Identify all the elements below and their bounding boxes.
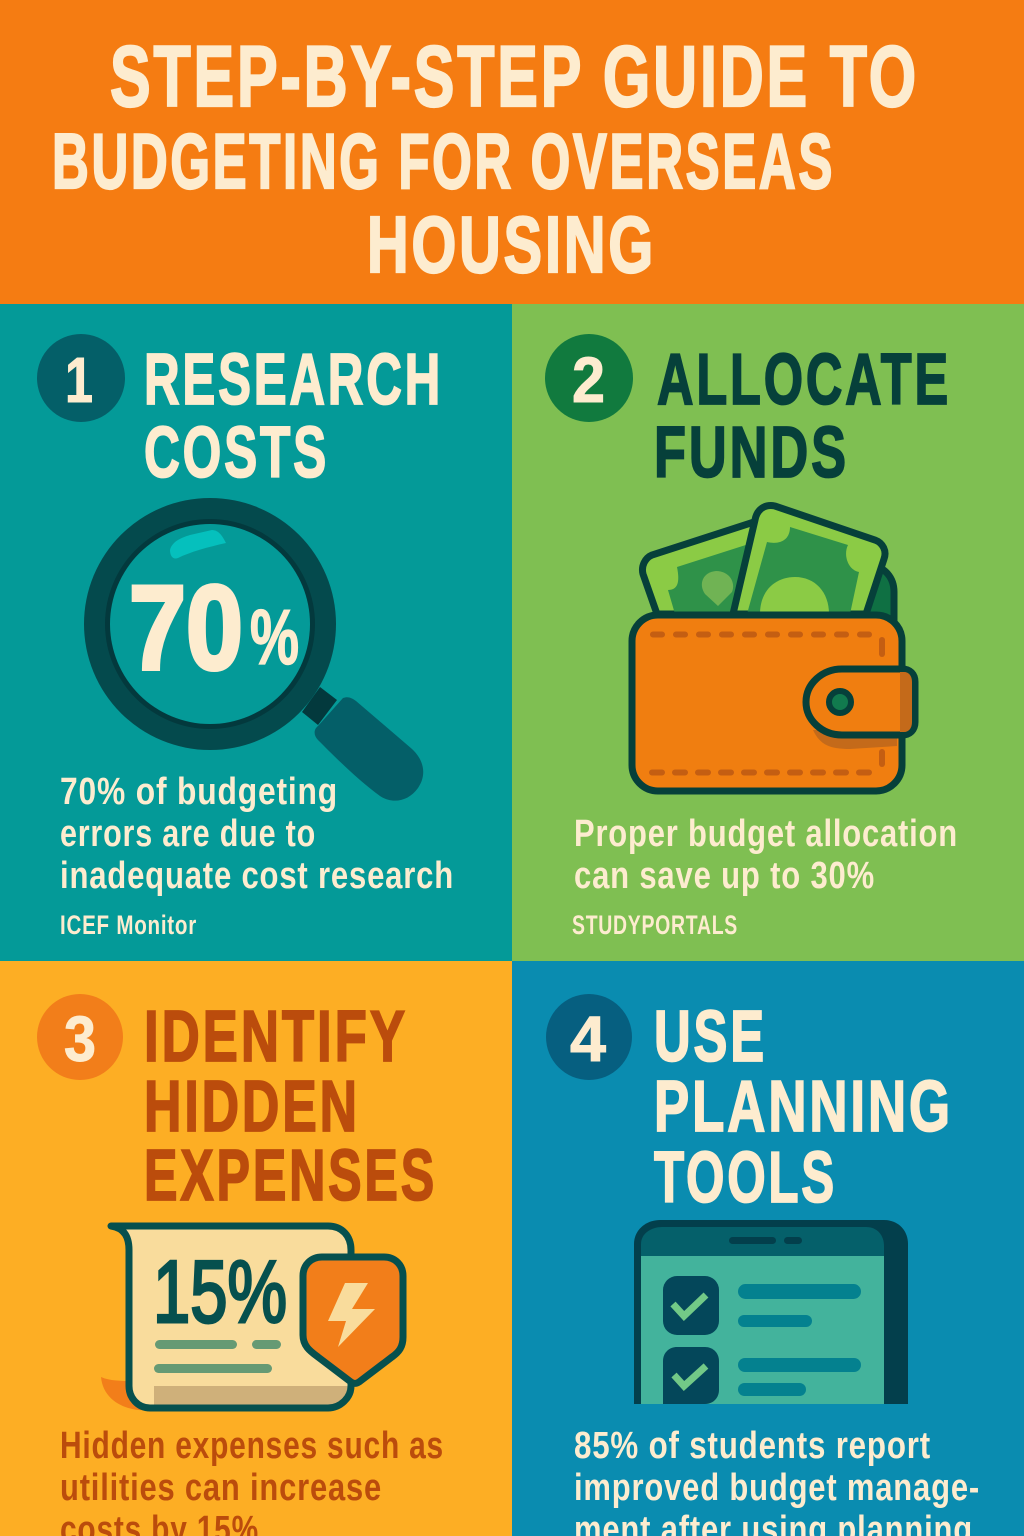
body text: Hidden expenses such as — [60, 1425, 444, 1467]
panel: use planning tools — [512, 961, 1024, 1536]
step 2 badge — [545, 334, 633, 422]
heading: identify hidden expenses: EXPENSES — [144, 1136, 437, 1216]
heading: research costs: RESEARCH — [144, 340, 443, 420]
source: STUDYPORTALS — [572, 910, 738, 940]
header band — [0, 0, 1024, 304]
icon: wallet with banknotes — [632, 506, 915, 791]
heading: use planning tools: TOOLS — [654, 1138, 837, 1218]
source: ICEF Monitor — [60, 910, 197, 940]
step 3 badge — [37, 994, 123, 1080]
heading: use planning tools — [654, 997, 953, 1218]
body text: 85% of students report — [574, 1425, 931, 1467]
step 2 badge: 2 — [572, 344, 605, 416]
step 3 badge: 3 — [64, 1003, 96, 1075]
icon: phone with checklist — [634, 1220, 908, 1404]
title: HOUSING — [367, 200, 656, 289]
checklist row 1 — [663, 1276, 861, 1335]
icon: document with 15% and shield — [101, 1226, 403, 1410]
step 4 badge: 4 — [570, 1003, 606, 1075]
body text: errors are due to — [60, 813, 316, 855]
icon: magnifying glass 70%: 70 — [129, 561, 243, 695]
panel: allocate funds — [512, 304, 1024, 961]
body text: 70% of budgeting — [60, 771, 338, 813]
step 1 badge — [37, 334, 125, 422]
body text — [60, 1425, 444, 1536]
step 4 badge — [546, 994, 632, 1080]
icon: magnifying glass 70% — [84, 498, 423, 801]
step 1 badge: 1 — [65, 344, 93, 416]
body text: can save up to 30% — [574, 855, 875, 897]
icon: magnifying glass 70%: % — [250, 593, 299, 681]
checklist row 2 — [663, 1347, 861, 1404]
heading: identify hidden expenses — [144, 997, 437, 1216]
body text: utilities can increase — [60, 1467, 382, 1509]
heading: research costs: COSTS — [144, 413, 329, 493]
heading: use planning tools: USE — [654, 997, 767, 1077]
panel: identify hidden expenses — [0, 961, 512, 1536]
icon: document with 15% and shield: 15% — [153, 1242, 287, 1341]
body text — [574, 813, 958, 897]
heading: research costs — [144, 340, 443, 493]
heading: allocate funds: FUNDS — [654, 413, 849, 493]
title — [52, 29, 919, 289]
heading: identify hidden expenses: HIDDEN — [144, 1067, 360, 1147]
panel: research costs — [0, 304, 512, 961]
body text — [574, 1425, 980, 1536]
body text: inadequate cost research — [60, 855, 454, 897]
heading: identify hidden expenses: IDENTIFY — [144, 997, 408, 1077]
body text — [60, 771, 454, 897]
heading: allocate funds — [654, 340, 951, 493]
